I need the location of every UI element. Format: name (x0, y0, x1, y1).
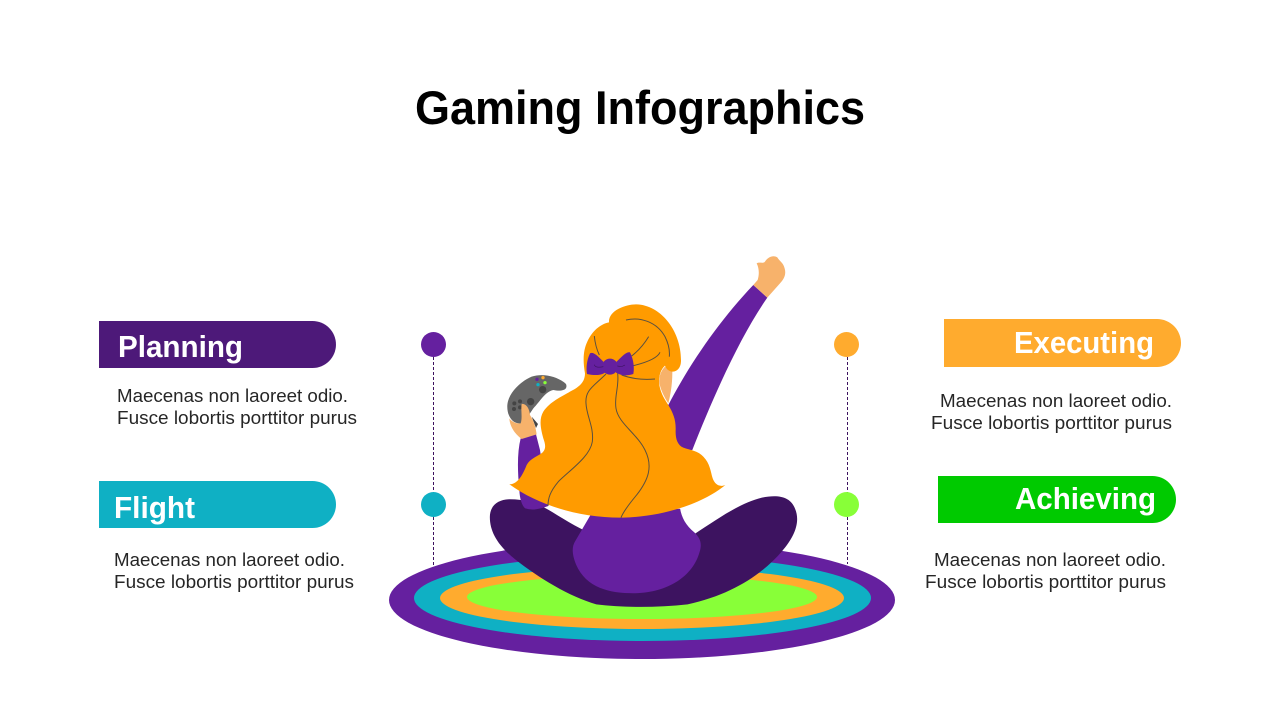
planning label bar: Planning (118, 329, 243, 364)
left forearm (518, 434, 548, 510)
achieving label bar: Achieving (1015, 481, 1156, 516)
concentric floor mat (389, 541, 895, 659)
executing text: Fusce lobortis porttitor purus (931, 412, 1172, 433)
left timeline with dots (421, 332, 446, 566)
planning label bar (99, 321, 336, 368)
panel: executing (931, 319, 1181, 433)
achieving label bar (938, 476, 1176, 523)
crossed legs and torso (490, 496, 797, 607)
game controller (507, 375, 566, 428)
flight text: Fusce lobortis porttitor purus (114, 571, 354, 592)
achieving text: Fusce lobortis porttitor purus (925, 571, 1166, 592)
planning text: Maecenas non laoreet odio. (117, 385, 348, 406)
panel: planning (99, 321, 357, 428)
planning text: Fusce lobortis porttitor purus (117, 407, 357, 428)
executing label bar: Executing (1014, 325, 1154, 360)
hair strands (548, 319, 669, 518)
hair bow (587, 352, 634, 375)
raised fist (753, 256, 785, 298)
raised arm (668, 285, 767, 453)
panel: flight (99, 481, 354, 592)
title: Gaming Infographics (415, 81, 865, 134)
neck and ear (659, 367, 672, 403)
flight label bar: Flight (114, 490, 195, 525)
executing label bar (944, 319, 1181, 367)
girl gamer illustration (490, 256, 797, 607)
executing text: Maecenas non laoreet odio. (940, 390, 1172, 411)
right timeline with dots (834, 332, 859, 564)
achieving text: Maecenas non laoreet odio. (934, 549, 1166, 570)
long hair (509, 304, 725, 518)
flight text: Maecenas non laoreet odio. (114, 549, 345, 570)
flight label bar (99, 481, 336, 528)
panel: achieving (925, 476, 1176, 592)
hand holding controller (509, 404, 537, 439)
